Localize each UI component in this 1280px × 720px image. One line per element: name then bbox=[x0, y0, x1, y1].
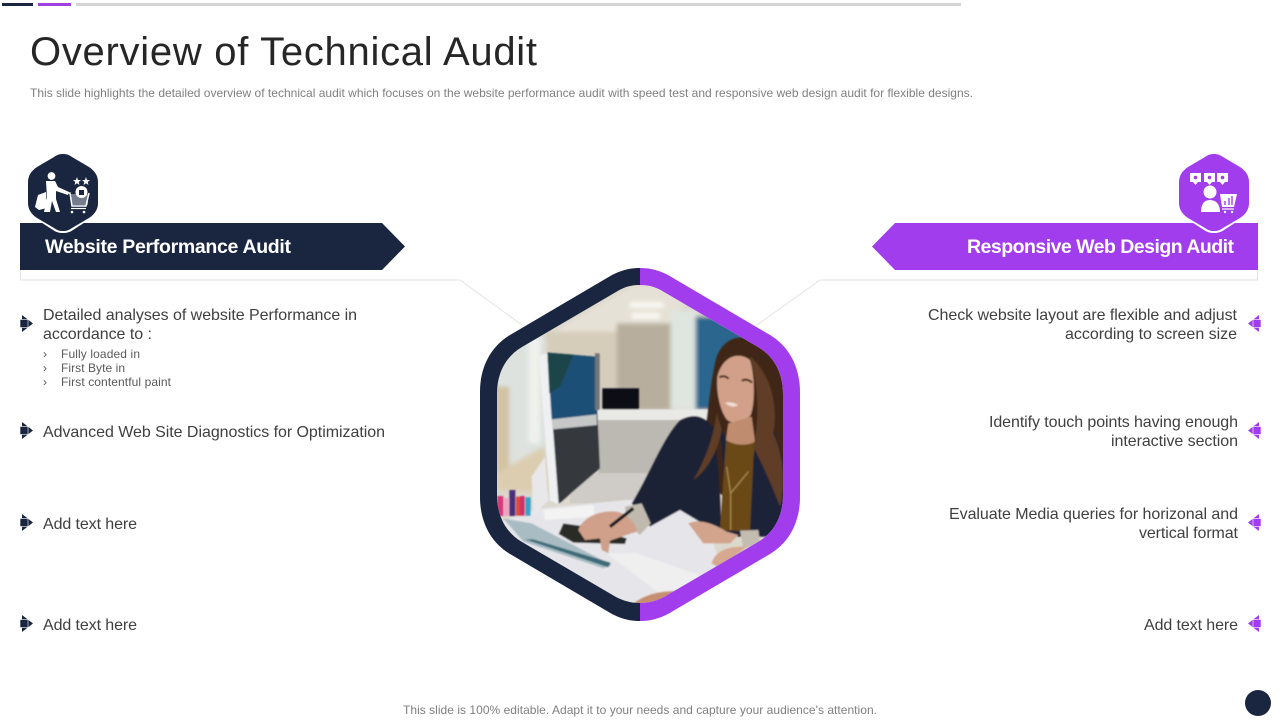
item 3: Add text here bbox=[43, 516, 137, 533]
connector lines bbox=[20, 270, 1258, 325]
item 1: according to screen size bbox=[1065, 326, 1237, 343]
banner heading: Website Performance Audit bbox=[45, 236, 292, 258]
item 2: Identify touch points having enough bbox=[989, 414, 1238, 431]
sub-list: › bbox=[43, 375, 47, 389]
sub-list: First contentful paint bbox=[61, 375, 172, 389]
icon: shopper with cart bbox=[27, 152, 99, 233]
bullet arrow bbox=[20, 315, 33, 332]
item 1 text: accordance to : bbox=[43, 326, 152, 343]
item 1 text: Detailed analyses of website Performance in bbox=[43, 307, 357, 324]
item 1 text bbox=[43, 307, 357, 343]
item 3 bbox=[949, 506, 1261, 542]
panel: right list bbox=[928, 307, 1261, 634]
footer note: This slide is 100% editable. Adapt it to your needs and capture your audience's attention. bbox=[403, 703, 877, 717]
item 4: Add text here bbox=[1144, 617, 1238, 634]
item 2: Advanced Web Site Diagnostics for Optimization bbox=[43, 424, 385, 441]
banner: purple arrow bbox=[872, 223, 1258, 270]
banner heading: Responsive Web Design Audit bbox=[967, 236, 1234, 258]
panel: responsive web design audit header bbox=[872, 152, 1258, 270]
item 4: Add text here bbox=[43, 617, 137, 634]
sub-list: Fully loaded in bbox=[61, 347, 140, 361]
item 2: interactive section bbox=[1111, 433, 1238, 450]
subtitle: This slide highlights the detailed overview of technical audit which focuses on the website performance audit with speed test and responsive web design audit for flexible designs. bbox=[30, 86, 973, 100]
sub-list bbox=[43, 347, 172, 389]
title: Overview of Technical Audit bbox=[30, 30, 537, 74]
banner: navy arrow bbox=[20, 223, 405, 270]
panel: left list bbox=[20, 307, 385, 634]
icon: user with ratings and cart bbox=[1178, 152, 1250, 233]
item 1 bbox=[928, 307, 1261, 343]
item 2 bbox=[989, 414, 1261, 450]
item 3: vertical format bbox=[1139, 525, 1239, 542]
top progress bars bbox=[2, 3, 961, 6]
item 3: Evaluate Media queries for horizonal and bbox=[949, 506, 1238, 523]
item 1: Check website layout are flexible and adjust bbox=[928, 307, 1238, 324]
page marker circle bbox=[1245, 690, 1271, 716]
hexagon frame: navy left half bbox=[480, 268, 640, 621]
photo: woman working at desktop computer bbox=[493, 280, 793, 607]
sub-list: › bbox=[43, 361, 47, 375]
item 1 with sub-list bbox=[20, 307, 357, 389]
hexagon frame: purple right half bbox=[640, 268, 800, 621]
sub-list: › bbox=[43, 347, 47, 361]
panel: website performance audit header bbox=[20, 152, 405, 270]
sub-list: First Byte in bbox=[61, 361, 125, 375]
central hexagon photo bbox=[480, 268, 800, 621]
